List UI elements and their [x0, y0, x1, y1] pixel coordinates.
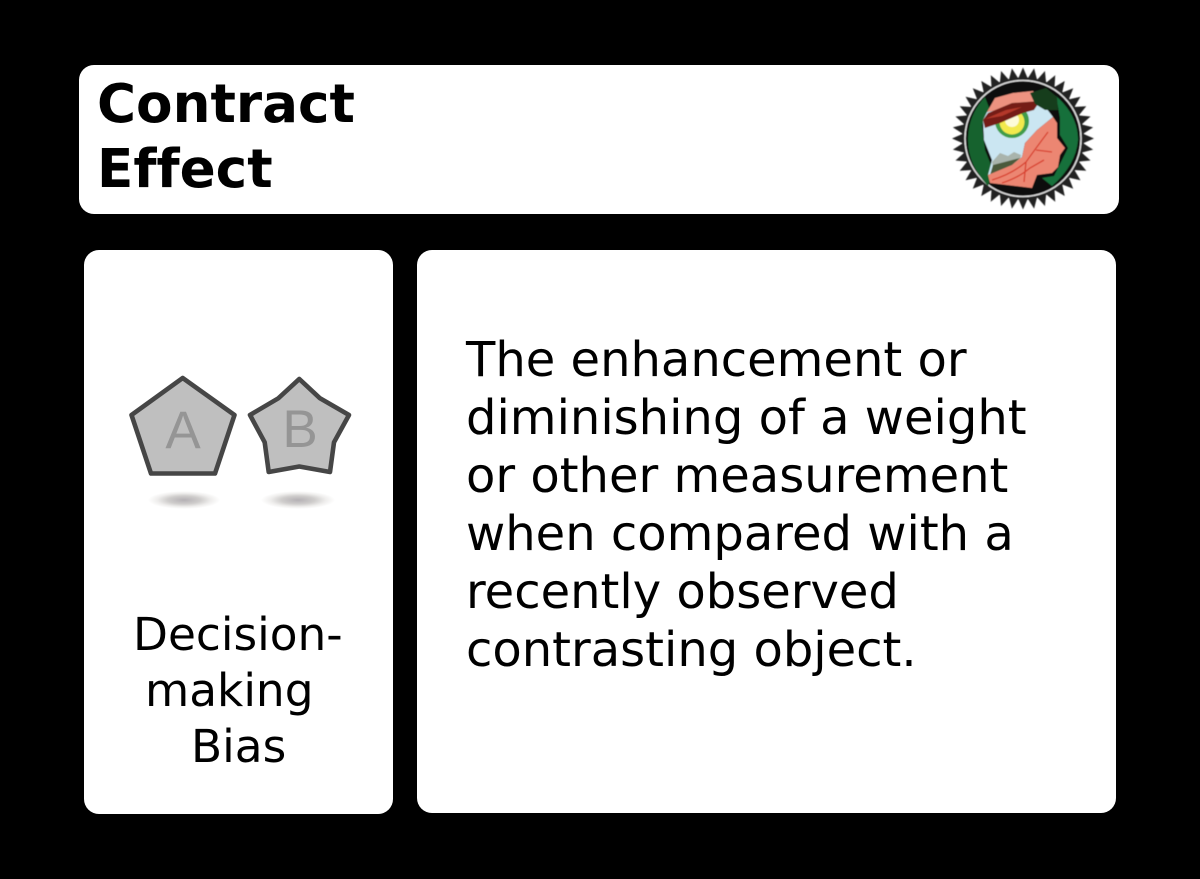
bias label: Decision-	[133, 608, 343, 661]
sky inside the head	[983, 100, 1053, 175]
icon: seal with laurelled head	[952, 67, 1094, 210]
mountains	[992, 152, 1021, 172]
title	[97, 73, 355, 200]
pentagon A: A	[165, 401, 201, 460]
pentagon A	[132, 378, 234, 474]
bias label: making	[145, 664, 314, 717]
bias label: Bias	[191, 720, 286, 773]
bias label	[133, 608, 343, 773]
star B: B	[282, 400, 318, 459]
sun	[995, 104, 1029, 138]
definition text	[466, 332, 1027, 678]
panel: title banner	[79, 65, 1119, 214]
definition text: contrasting object.	[466, 622, 917, 678]
title: Contract	[97, 73, 355, 135]
definition text: The enhancement or	[466, 332, 967, 388]
shadow A	[148, 491, 220, 509]
icon: pentagon A and star B	[129, 376, 352, 508]
definition text: when compared with a	[466, 506, 1014, 562]
title: Effect	[97, 138, 273, 200]
definition text: or other measurement	[466, 448, 1008, 504]
panel: bias category	[84, 250, 393, 814]
shadow B	[261, 491, 335, 509]
definition text: diminishing of a weight	[466, 390, 1027, 446]
upper scalp	[987, 91, 1040, 112]
definition text: recently observed	[466, 564, 899, 620]
wreath	[983, 101, 1040, 128]
panel: definition	[417, 250, 1116, 813]
face and neck	[988, 117, 1065, 188]
star B	[250, 379, 349, 472]
